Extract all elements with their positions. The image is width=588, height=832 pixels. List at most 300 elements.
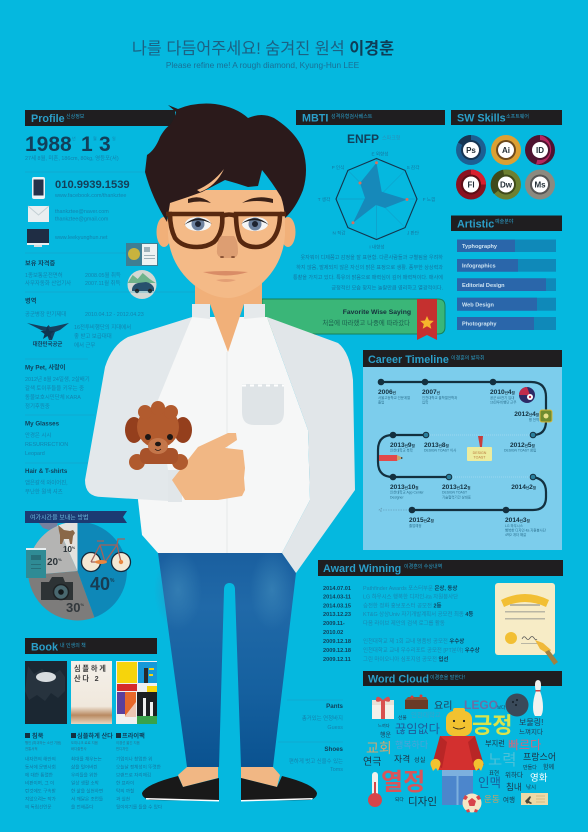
hair and t-shirts: 앱은갈색 와이어진, [25, 478, 68, 486]
2013 October: 인천대학교 App Center [390, 490, 425, 494]
left shoe [142, 776, 219, 802]
bar: infographics: Infographics [462, 264, 496, 270]
heading: word cloud: 이경훈을 말한다! [430, 674, 465, 681]
book 1 caption: 동서에 문명사회 [25, 764, 56, 770]
shoes note: Shoes [324, 746, 344, 753]
military service: 병역 [25, 297, 37, 305]
icon: rank badge [540, 410, 552, 422]
heading: mbti [296, 110, 445, 125]
book 3 caption: 탁의 까칠 [116, 788, 134, 794]
award list: LG 하우시스 행복한 디자인-ita 자원봉사단 [363, 592, 458, 600]
2013 December: 2013년12월 [442, 484, 470, 491]
2013 September [390, 442, 415, 452]
heading: book: Book [31, 642, 59, 654]
panel: artistic [451, 216, 562, 330]
icon: monitor [27, 229, 49, 247]
book 3 caption: 한 프라이 [116, 780, 134, 786]
award dates [323, 586, 351, 663]
pants note: 총거있는 연청바지 [302, 714, 343, 722]
panel: sw skills [451, 110, 562, 200]
my glasses: 안경은 시시 [25, 432, 51, 439]
book 3 caption: 기업이나 창업한 위 [116, 756, 152, 762]
book cover 1 [25, 661, 67, 724]
award list: Pathfinder Awards 포스터부문 은상, 동상 [363, 584, 457, 592]
heading: award winning: 이경훈의 수상내역 [404, 563, 442, 570]
heading: profile: 신상정보 [66, 113, 85, 120]
word: feeling: 느껴지다 [519, 727, 543, 736]
service description [74, 323, 131, 349]
word: exercise: 운동 [484, 794, 500, 804]
icon: bicycle [82, 539, 130, 572]
description: 웃자뭐이 디제쯤고 감정을 잘 표현함. 다른사람들과 구별됨을 우려하 [300, 254, 443, 261]
word: incheon: 인천대학교 [411, 710, 441, 719]
book cover 2: 산다 2 [74, 674, 100, 683]
word: luck: 행운 [380, 731, 392, 739]
my pet: 갈색 토이푸들을 키우는 중 [25, 384, 84, 392]
heading: profile: Profile [31, 113, 65, 125]
book 3 caption: 민디자인 [116, 746, 128, 751]
right shoe [241, 776, 317, 802]
award dates: 2013.12.23 [323, 612, 351, 618]
book 2 caption: 을 전해준다 [71, 804, 94, 810]
book 2 caption: 삶을 털어버린 [71, 764, 98, 770]
word: passion: 열정 [381, 769, 425, 796]
icon: thermometer [368, 772, 382, 807]
timeline nodes [378, 379, 536, 513]
ears [156, 217, 296, 247]
description: 통찰을 가지고 있다. 특유의 밝음으로 매력심이 깊어 매력적이다. 매사에 [293, 274, 443, 281]
heading: sw skills: SW Skills [457, 112, 506, 124]
icon: air force badge [519, 387, 535, 403]
word: church: 교회 [366, 740, 392, 756]
certificates: 2007.11월 취득 [85, 279, 121, 287]
heading: award winning [318, 560, 563, 576]
neck [195, 270, 262, 352]
my pet [25, 364, 90, 410]
word: fishing: 낚시 [526, 783, 536, 791]
slice 20 percent [28, 526, 78, 575]
icon: mail [28, 206, 49, 222]
2014 March [505, 517, 546, 537]
birth date: 3 [99, 133, 111, 156]
award list: 다음 라이브 제안의 검색 로그룹 활동 [363, 619, 445, 627]
book 1 caption: 런것에도 구속받 [25, 788, 57, 794]
bar: photography: Photography [462, 322, 497, 328]
radar axis labels [318, 150, 435, 250]
2007 [422, 389, 457, 404]
2007: 입학 [422, 400, 428, 404]
word: sincerity: 성실 [414, 756, 426, 764]
word: fast: 빠르다 [508, 738, 541, 752]
icon: book [26, 548, 46, 578]
award list [363, 584, 480, 663]
2010: 2010년4월 [490, 389, 515, 396]
2012 May: 2012년5월 [510, 442, 535, 449]
my pet: 동물보호시민단체 KARA [25, 393, 81, 401]
percent 40: % [110, 578, 115, 584]
2010: 공군 60전기 입대 [490, 395, 514, 400]
icon: gift [372, 697, 394, 719]
2006: 2006년 [378, 389, 396, 396]
personality type: 스파크형 [382, 134, 400, 142]
word: happy: 행복하다 [395, 739, 429, 750]
2013 September: 2013년9월 [390, 442, 415, 449]
2012 April [514, 411, 539, 422]
book 3 caption [116, 732, 163, 810]
award dates: 2009.12.18 [323, 639, 351, 645]
2014 February: 2014년2월 [511, 484, 536, 491]
email addresses: thankztee@naver.com [55, 209, 109, 215]
icon: name tag: TOAST [474, 456, 486, 460]
icon: certificate [495, 583, 558, 665]
book 2 caption: 한 삶을 실천하면 [71, 788, 103, 794]
icon: car [128, 270, 156, 299]
book 2 caption: 일상 생활 소박 [71, 780, 100, 786]
subtitle: Please refine me! A rough diamond, Kyung-Hun LEE [166, 60, 360, 70]
word: movie: 영화 [530, 773, 548, 784]
my pet: My Pet, 사랑이 [25, 364, 65, 372]
heading: career timeline [363, 350, 562, 367]
2013 December: 기술협력기간 상대표 [442, 494, 471, 500]
word: french: 프랑스어 [523, 751, 556, 762]
radar axis labels: F 느낌 [423, 196, 435, 202]
book cover 2: 심플하게 [74, 664, 108, 673]
heading: mbti: 성격유형검사베스트 [331, 113, 373, 120]
face [168, 190, 285, 298]
percent 20: % [58, 557, 62, 562]
book 2 caption: 서 깨달은 조언들 [71, 796, 103, 802]
service description: 좋 받고 보급대대 [74, 332, 112, 340]
2014 March: 4박2 개더 해갈 [505, 532, 526, 537]
heading: profile [25, 110, 175, 126]
2013 September: 인천대학교 복학 [390, 448, 413, 452]
2012 May: DESIGN TOAST 창립 [504, 448, 536, 452]
eyes [184, 217, 269, 231]
lego figure [430, 708, 484, 805]
book 3 caption: 브랜드로 자리매김 [116, 772, 151, 778]
word: together: 함께 [543, 763, 554, 771]
word: make: 만들다 [523, 764, 537, 771]
birth date: 월 [93, 135, 97, 141]
favorite wise saying [262, 299, 445, 340]
award dates: 2014.03.15 [323, 604, 351, 610]
radar axis labels: J 판단 [407, 230, 420, 236]
dog [125, 401, 192, 470]
birth date: 1 [81, 133, 93, 156]
glasses [166, 214, 286, 247]
heading: book: 내 인생의 책 [60, 642, 86, 649]
birth date: 1988 [25, 133, 72, 156]
panel: career timeline [363, 350, 562, 550]
word: finally: 침내 [506, 782, 522, 792]
nose [217, 236, 238, 258]
favorite wise saying: 처음에 따라했고 나중에 따라갔다 [322, 318, 410, 327]
hair and t-shirts: 무난한 원색 셔츠 [25, 488, 63, 496]
word: boda: 보다 [497, 704, 506, 711]
2012 April: 2012년4월 [514, 411, 539, 418]
icon: camera [41, 577, 73, 600]
personality type [347, 132, 400, 146]
military service [25, 297, 144, 318]
book 3 caption: 이경선 옮긴 지음 [116, 740, 140, 745]
percent 30: 30 [66, 600, 80, 615]
award dates: 2014.03-11 [323, 594, 351, 600]
certificates [25, 260, 121, 287]
icon: name tag [467, 436, 492, 461]
my pet: 2012년 8월 24일생, 2살배기 [25, 375, 90, 383]
skill ring: indesign: ID [536, 146, 544, 155]
book 1 caption: 에 대한 통렬한 [25, 772, 54, 778]
2014 March: LG 하우시스 [505, 523, 523, 528]
character illustration [85, 104, 355, 802]
certificates: 사무자동화 산업기사 [25, 279, 71, 287]
clothing notes [278, 700, 344, 773]
book 1 caption [25, 732, 61, 810]
word: gift: 선물 [398, 714, 407, 721]
2015 February: 졸업예정 [409, 523, 421, 528]
book 1 caption: 내자연의 해안의 [25, 756, 56, 762]
book 3 caption: 과 실천 [116, 796, 130, 802]
word: design: 디자인 [408, 796, 437, 808]
birth date [25, 133, 116, 156]
2015 February [409, 517, 434, 528]
word: lego: LEGO [464, 698, 498, 712]
2013 October: 2013년10월 [390, 484, 418, 491]
bar: editorial design: Editorial Design [462, 283, 505, 289]
heading: artistic: Artistic [457, 218, 494, 230]
heading: sw skills: 소프트웨어 [506, 113, 529, 120]
book 1 caption: 비판이며, 그 이 [25, 780, 54, 786]
2014 March: 2014년3월 [505, 517, 530, 524]
icon: license [126, 243, 158, 266]
radar axis labels: T 생각 [318, 196, 331, 203]
right sleeve [267, 317, 355, 573]
award dates: 2014.07.01 [323, 586, 351, 592]
pants note [302, 703, 344, 731]
book 1 caption: 의 독립선언문 [25, 804, 52, 810]
award list: 승전한 정화 홍보포스터 공모전 2등 [363, 602, 441, 610]
description [293, 254, 443, 292]
word: play: 연극 [363, 756, 381, 768]
word: positive: 긍정 [472, 713, 512, 738]
word: bowling: 보물링! [519, 717, 543, 727]
mouth [203, 271, 248, 282]
book 1 caption: 전통서적 [25, 746, 37, 751]
2006: 졸업 [378, 400, 384, 404]
2014 March: 행복한 디자인-ita 자원봉사단 [505, 528, 546, 532]
skill ring: dreamweaver: Dw [500, 180, 513, 190]
heading: award winning: Award Winning [323, 563, 401, 575]
shoes note: 편하게 벗고 신을수 있는 [289, 757, 343, 765]
description: 하지 않음, 발제되지 않은 자신의 밝은 표정으로 생활. 풍부한 상상력과 [296, 264, 443, 271]
2010 [490, 389, 517, 404]
my glasses: Leopard [25, 451, 45, 457]
radar axis labels: S 감각 [407, 164, 420, 171]
book 1 caption: 행인 (파괴하는 소년 기음) [25, 740, 61, 745]
icon: pencil [379, 455, 403, 461]
heading: sw skills [451, 110, 562, 125]
book 2 caption [71, 732, 113, 810]
panel: profile [25, 110, 195, 496]
book 3 caption: 프라이팩 [122, 732, 145, 740]
radar axis labels: I 내향성 [369, 244, 385, 250]
personal stats: 27세 8월, 미혼, 186cm, 80kg, 영등포(서) [25, 154, 119, 162]
2013 December: DESIGN TOAST [442, 490, 467, 494]
pants note: Pants [326, 703, 344, 710]
certificates: 1종보통운전면허 [25, 271, 63, 279]
award dates: 2009.12.18 [323, 648, 351, 654]
2007: 인천대학교 을학열전학과 [422, 395, 457, 400]
radar axis labels: N 직감 [332, 230, 346, 236]
timeline path [378, 382, 546, 512]
word: diligent: 부지런 [485, 739, 505, 748]
2006 [378, 389, 410, 404]
skill ring: photoshop: Ps [466, 146, 476, 155]
heading: word cloud: Word Cloud [368, 674, 429, 686]
radar axis labels: P 인식 [332, 164, 344, 171]
word: endless: 끊임없다 [395, 722, 440, 736]
my pet: 정기후원중 [25, 402, 50, 410]
2013 December [442, 484, 471, 500]
hair [145, 104, 306, 222]
heading: career timeline: 이경훈의 발자취 [451, 354, 485, 362]
icon: ticket [521, 793, 548, 805]
book cover 2 [71, 661, 112, 724]
skill ring: ms office: Ms [534, 180, 546, 190]
certificates: 2008.05월 취득 [85, 271, 121, 279]
icon: soccer ball [462, 794, 482, 812]
word: effort: 노력 [488, 751, 517, 769]
heading: artistic [451, 216, 562, 231]
2013 October [390, 484, 425, 500]
email addresses: thankztee@gmail.com [55, 216, 109, 222]
service description: 16전투비행단의 지대에서 [74, 323, 131, 331]
hand [172, 433, 245, 500]
facebook url: www.facebook.com/thankztee [54, 193, 126, 199]
percent 10: 10 [63, 545, 72, 554]
certificates: 보유 자격증 [25, 260, 55, 268]
panel: word cloud [363, 671, 562, 812]
2013 August: DESIGN TOAST 이사 [424, 448, 457, 452]
skill ring: flash: Fl [467, 180, 475, 190]
slice 30 percent [28, 571, 94, 620]
book 2 caption: 최대를 채우는는 [71, 756, 102, 762]
heading: word cloud [363, 671, 562, 686]
birth date: 일 [112, 135, 116, 141]
personality type: ENFP [347, 132, 379, 146]
award list: 인천대학교 제 1회 교내 명품빙 공모전 우수상 [363, 637, 464, 645]
eyebrows [188, 197, 273, 203]
favorite wise saying: Favorite Wise Saying [343, 309, 411, 316]
shoes note: Toms [330, 767, 343, 773]
hair and t-shirts: Hair & T-shirts [25, 468, 68, 475]
2013 August [424, 442, 457, 452]
pocket [242, 384, 284, 425]
description: 긍정적인 모습 찾지는 놀랄만큼 영리하고 열광적이다. [331, 284, 443, 292]
award dates: 2009.11- [323, 621, 345, 627]
word: express: 표현 [489, 769, 499, 777]
bar: web design: Web Design [462, 302, 494, 308]
radar axis labels: E 외향성 [371, 150, 389, 158]
percent 40: 40 [90, 574, 110, 594]
ribbon with star [417, 299, 437, 340]
my glasses: My Glasses [25, 420, 60, 428]
book cover 3 [116, 661, 157, 724]
word: network: 인맥 [478, 776, 501, 790]
book 2 caption: 우리들을 위한 [71, 772, 98, 778]
book 3 caption: 오늘날 정체성이 뚜렷한 [116, 764, 162, 770]
percent 10: % [72, 546, 76, 550]
panel: mbti [262, 110, 445, 340]
hair and t-shirts [25, 468, 68, 496]
icon: name tag: DESIGN [473, 451, 487, 455]
word: license: 자격 [394, 753, 410, 764]
military service: 2010.04.12 - 2012.04.23 [85, 312, 144, 318]
cuff [168, 470, 182, 502]
book 1 caption: 지않으려는 작가 [25, 796, 57, 802]
percent 20: 20 [47, 557, 58, 568]
heading: mbti: MBTI [302, 112, 328, 124]
shirt body [138, 317, 310, 553]
slice 40 percent [78, 522, 127, 618]
milestones [378, 389, 546, 537]
panel: award winning [318, 560, 563, 665]
award list: 그린 마이오니아 심포지엄 공모전 입선 [363, 655, 448, 663]
award list: 인천대학교 교내 우수리포트 공모전 [PT분야] 우수상 [363, 646, 480, 654]
book 1 caption: 침묵 [32, 732, 44, 740]
2006: 서울고등학교 인문계열 [378, 395, 410, 400]
heading: career timeline: Career Timeline [368, 354, 449, 366]
heading: book [25, 638, 157, 654]
collar [192, 304, 265, 319]
panel: book [25, 638, 163, 810]
word: yori: 요리 [434, 700, 452, 712]
heading: artistic: 예술분야 [495, 218, 514, 225]
phone number: 010.9939.1539 [55, 179, 130, 191]
jeans [154, 550, 296, 767]
ribbon label: 여가시간을 보내는 방법 [30, 514, 89, 522]
2013 October: Designer [390, 496, 404, 500]
pants note: Guess [327, 725, 343, 731]
word: feel: 느끼다 [378, 722, 390, 729]
military service: 공군병장 만기제대 [25, 310, 66, 318]
my glasses: RESURRECTION [25, 442, 68, 448]
icon: air force emblem [27, 323, 69, 348]
2007: 2007년 [422, 389, 440, 396]
2012 May [504, 442, 536, 452]
skill ring: illustrator: Ai [502, 146, 510, 155]
email addresses [55, 209, 109, 222]
birth date: 년 [72, 135, 76, 141]
icon: bowling ball [506, 694, 528, 716]
title [132, 40, 394, 70]
icon: air force emblem: 대한민국공군 [33, 340, 62, 348]
award dates: 2010.02 [323, 630, 343, 636]
chart: free time pie [25, 511, 130, 620]
slice 10 percent [57, 522, 78, 571]
2010: 16전투비행단 근무 [490, 400, 517, 404]
2013 August: 2013년8월 [424, 442, 449, 449]
bar: typography: Typhography [462, 244, 498, 250]
website: www.leekyunghun.net [54, 235, 108, 241]
icon: cake [405, 694, 428, 709]
book 2 caption: 심플하게 산다 [77, 732, 113, 740]
book 2 caption: 바다출판사 [71, 746, 87, 751]
service description: 에서 근무 [74, 341, 95, 349]
word: do: 되다 [395, 796, 404, 803]
icon: phone [32, 177, 45, 199]
icon: bowling pin [533, 680, 543, 716]
